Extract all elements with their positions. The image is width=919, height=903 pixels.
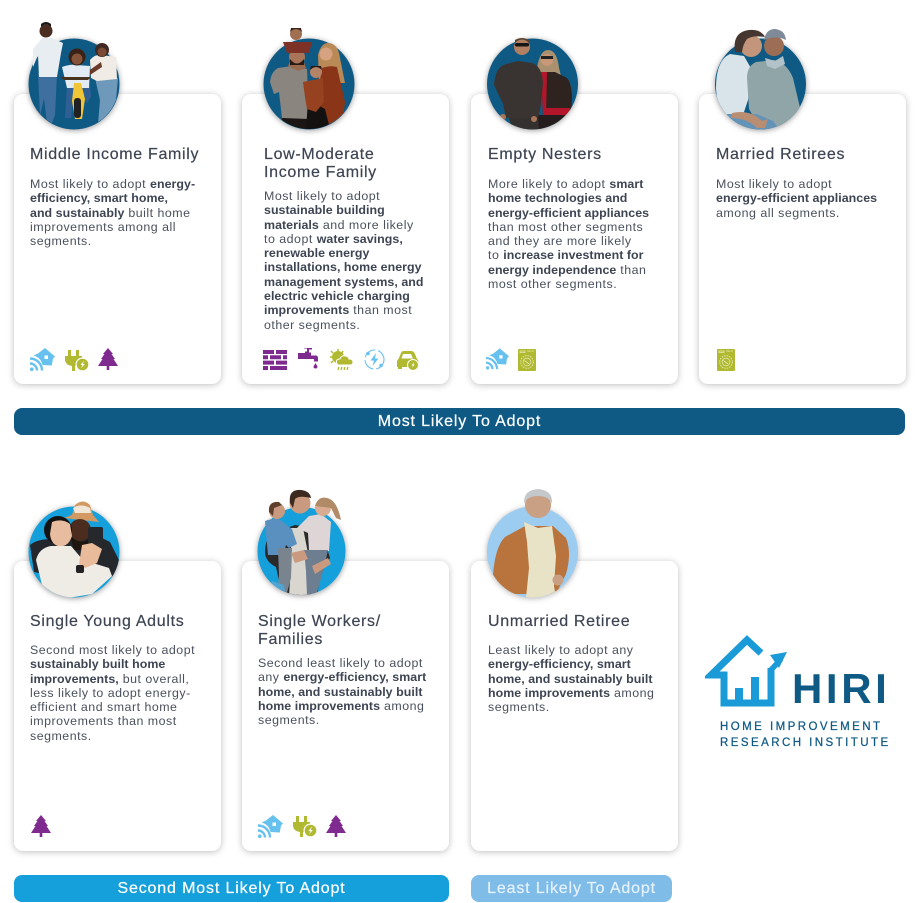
heading: Income Family [264,164,377,181]
heading: Families [258,631,323,648]
text block: segments. [30,234,92,248]
text block: most other segments. [488,277,617,291]
banner: second most likely to adopt: Second Most Likely To Adopt [117,880,346,897]
banner: least likely to adopt [471,875,672,902]
icon: tree [98,348,118,370]
text block: to increase investment for [488,248,644,262]
text block: electric vehicle charging [264,289,410,303]
text block: energy-efficient appliances [488,206,649,220]
text block: efficient and smart home [30,700,177,714]
text block [30,177,195,248]
panel: Married Retirees [695,29,910,389]
avatar: unmarried retiree photo [484,489,582,602]
icon: smart home [258,815,283,838]
text block: renewable energy [264,246,369,260]
icon: renewable weather [330,349,352,370]
text block [488,643,654,714]
text block: installations, home energy [264,260,422,274]
text block: Second most likely to adopt [30,643,195,657]
logo wordmark: HIRI [792,665,890,712]
text block: any energy-efficiency, smart [258,670,426,684]
text block: Least likely to adopt any [488,643,633,657]
heading: Empty Nesters [488,146,602,163]
heading: Single Workers/ [258,613,381,630]
panel: Unmarried Retiree [467,489,682,856]
text block: improvements, but overall, [30,672,189,686]
text block: other segments. [264,318,360,332]
text block: Second least likely to adopt [258,656,423,670]
icon: house with rising arrow [705,635,787,706]
text block: efficiency, smart home, [30,191,168,205]
text block: energy-efficiency, smart [488,657,631,671]
logo tagline: HOME IMPROVEMENT [720,721,883,733]
heading: Low-Moderate [264,146,374,163]
heading: Married Retirees [716,146,845,163]
icon: efficient washer [717,349,735,371]
heading [264,146,377,181]
avatar: single workers and families photo [254,490,349,600]
avatar: low-moderate income family photo [260,28,358,134]
text block [716,177,877,220]
icon: tree [326,815,346,837]
text block: home improvements among [488,686,654,700]
logo tagline: RESEARCH INSTITUTE [720,737,891,749]
text block: home technologies and [488,191,627,205]
text block: More likely to adopt smart [488,177,643,191]
avatar: single young adults photo [25,502,123,602]
icon: EV plug [293,816,316,837]
text block: segments. [258,713,320,727]
text block: improvements than most [264,303,412,317]
icon: EV plug [65,350,88,371]
text block: materials and more likely [264,218,414,232]
text block: less likely to adopt energy- [30,686,191,700]
logo: Home Improvement Research Institute [705,635,891,749]
text block: sustainably built home [30,657,165,671]
icon: smart home [30,348,55,371]
text block: energy independence than [488,263,646,277]
text block [30,643,195,743]
text block: Most likely to adopt [264,189,380,203]
banner: most likely to adopt [14,408,905,435]
text block: and sustainably built home [30,206,191,220]
banner: most likely to adopt: Most Likely To Adopt [378,413,541,430]
text block: among all segments. [716,206,840,220]
banner: second most likely to adopt [14,875,449,902]
text block: Most likely to adopt [716,177,832,191]
text block: home, and sustainably built [258,685,423,699]
logo tagline [720,721,891,749]
icon: electric car [397,351,418,370]
heading: Middle Income Family [30,146,199,163]
panel: Middle Income Family [10,22,225,389]
icon: smart home [486,348,509,370]
heading: Unmarried Retiree [488,613,630,630]
heading [258,613,381,648]
text block: home improvements among [258,699,424,713]
text block [264,189,424,332]
icon: efficient washer [518,349,536,371]
text block: energy-efficient appliances [716,191,877,205]
avatar: married retirees photo [712,29,810,134]
text block: improvements than most [30,714,177,728]
heading: Single Young Adults [30,613,184,630]
text block [488,177,649,291]
text block: Most likely to adopt energy- [30,177,195,191]
text block: to adopt water savings, [264,232,403,246]
text block: segments. [30,729,92,743]
text block: than most other segments [488,220,643,234]
text block: management systems, and [264,275,424,289]
avatar: empty nesters photo [484,36,582,134]
text block: improvements among all [30,220,176,234]
icon: tree [31,815,51,837]
text block: home, and sustainably built [488,672,653,686]
icon: building materials [263,350,287,370]
text block: segments. [488,700,550,714]
panel: Single Workers/Families [238,490,453,856]
avatar: middle income family photo [25,22,123,134]
banner: least likely to adopt: Least Likely To Adopt [487,880,656,897]
icon: water tap [298,348,318,368]
icon: energy management [364,350,385,370]
panel: Empty Nesters [467,36,682,389]
panel: Low-Moderate Income Family [238,28,453,389]
panel: Single Young Adults [10,502,225,856]
text block: sustainable building [264,203,385,217]
text block [258,656,426,727]
text block: and they are more likely [488,234,632,248]
